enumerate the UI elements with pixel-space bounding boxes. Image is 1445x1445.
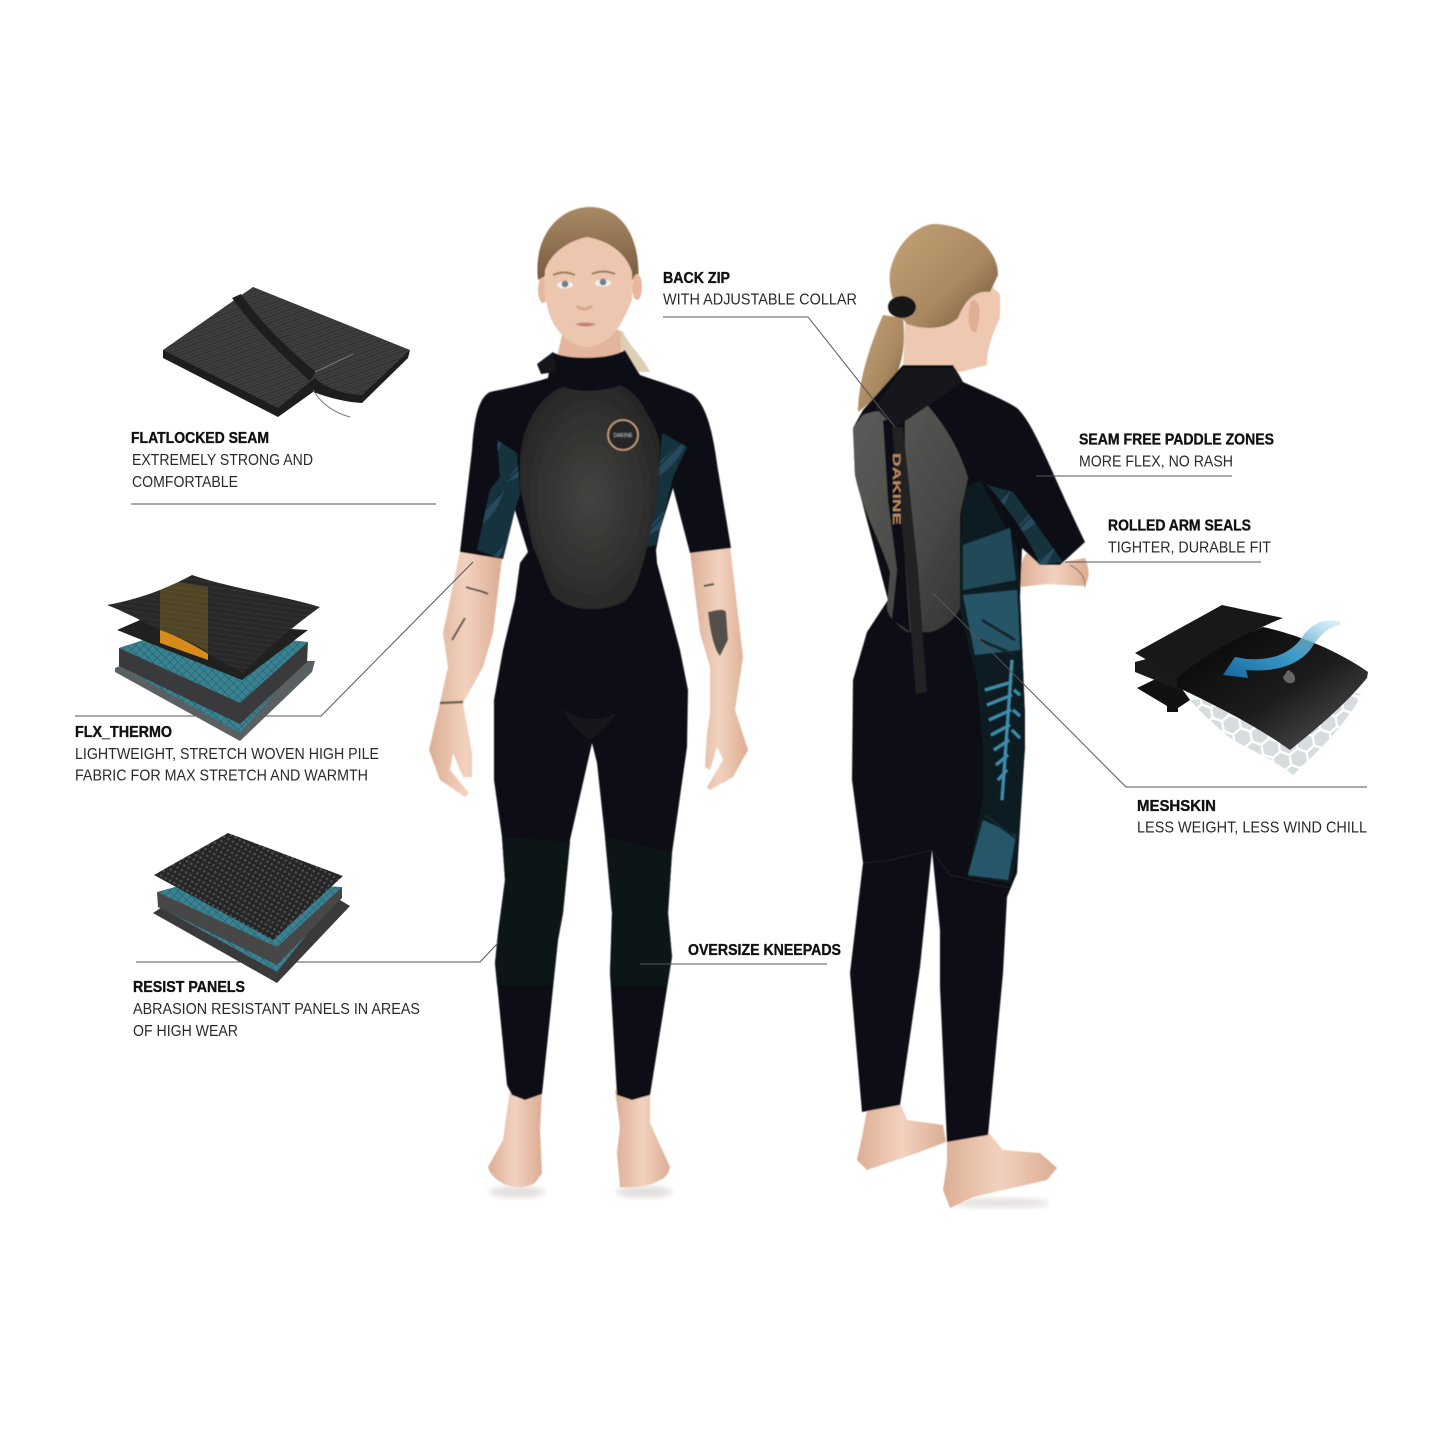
ears <box>538 274 642 303</box>
leader: back zip <box>663 317 895 427</box>
text: resist panels <box>133 979 420 1040</box>
knee panels <box>495 837 672 985</box>
collar flap <box>875 368 963 428</box>
text: oversize kneepads: OVERSIZE KNEEPADS <box>688 942 841 959</box>
text: seam free paddle zones: SEAM FREE PADDLE ZONES <box>1079 432 1274 448</box>
leader: resist panels <box>136 943 498 962</box>
leader: seam free paddle zones <box>1036 475 1232 477</box>
text: resist panels: RESIST PANELS <box>133 979 245 996</box>
text: meshskin <box>1137 798 1367 836</box>
face <box>544 237 632 347</box>
text: back zip <box>663 270 857 308</box>
text: flx thermo: FLX_THERMO <box>75 724 172 741</box>
text: rolled arm seals <box>1108 518 1271 556</box>
bottom layer <box>153 900 350 983</box>
sample top surface <box>163 287 410 408</box>
blue airflow arrow <box>1223 620 1340 678</box>
arm tattoos <box>440 584 728 703</box>
leader: rolled arm seals <box>1065 561 1261 563</box>
folded sleeve print <box>987 485 1063 565</box>
text: flatlocked seam <box>131 430 313 491</box>
text: flatlocked seam: COMFORTABLE <box>132 474 238 491</box>
icon: meshskin layer stack <box>1135 605 1368 775</box>
text: back zip: WITH ADJUSTABLE COLLAR <box>663 292 857 308</box>
eyes and mouth <box>553 272 615 326</box>
text: flatlocked seam: FLATLOCKED SEAM <box>131 430 269 447</box>
teal leaves <box>963 528 1016 590</box>
side print panel <box>960 480 1025 883</box>
text: resist panels: OF HIGH WEAR <box>133 1023 238 1040</box>
neck <box>556 330 622 362</box>
bottom layer <box>115 660 315 741</box>
text: flx thermo <box>75 724 379 784</box>
icon: flatlocked seam material sample <box>163 287 410 417</box>
text: meshskin: MESHSKIN <box>1137 798 1216 815</box>
ear <box>969 300 979 332</box>
text: flx thermo: LIGHTWEIGHT, STRETCH WOVEN HIGH PILE <box>75 746 379 763</box>
text: seam free paddle zones <box>1079 432 1274 470</box>
back model in wetsuit <box>850 224 1089 1208</box>
back grey panel <box>853 405 968 632</box>
loose thread <box>313 354 353 417</box>
hex mesh underlayer <box>1190 693 1363 775</box>
block side <box>157 887 342 965</box>
middle black layer <box>1135 650 1180 690</box>
print panels <box>477 433 687 559</box>
back wetsuit body <box>850 365 1085 1142</box>
chest panel <box>520 385 660 609</box>
hair <box>890 224 998 328</box>
leader: oversize kneepads <box>640 963 827 965</box>
text: rolled arm seals: TIGHTER, DURABLE FIT <box>1108 540 1271 556</box>
foot shadows <box>489 1186 672 1198</box>
scrunchie <box>888 296 916 318</box>
icon: flx thermo layer stack <box>107 575 320 741</box>
text: resist panels: ABRASION RESISTANT PANELS IN AREAS <box>133 1001 420 1018</box>
chest logo: DAKINE <box>614 433 633 439</box>
leader: flx thermo <box>75 562 473 716</box>
hair <box>537 207 638 285</box>
top sheet <box>1135 605 1283 678</box>
text: flx thermo: FABRIC FOR MAX STRETCH AND WARMTH <box>75 768 368 784</box>
bright fern <box>985 660 1020 800</box>
arms and hands <box>429 546 748 797</box>
text: rolled arm seals: ROLLED ARM SEALS <box>1108 518 1251 534</box>
carbon textured top sheet <box>154 833 343 940</box>
feet <box>488 1090 670 1187</box>
text: seam free paddle zones: MORE FLEX, NO RASH <box>1079 454 1233 470</box>
teal mesh layer <box>119 628 308 703</box>
front model in wetsuit <box>429 207 748 1198</box>
dark fleece layer <box>117 620 308 680</box>
foot shadow <box>950 1198 1050 1208</box>
feet <box>857 1103 1057 1208</box>
text: meshskin: LESS WEIGHT, LESS WIND CHILL <box>1137 820 1367 836</box>
text: flatlocked seam: EXTREMELY STRONG AND <box>132 452 313 469</box>
zip strap <box>892 427 927 694</box>
orange heat panel <box>160 628 208 660</box>
brand on spine: DAKINE <box>890 453 902 525</box>
collar tab <box>537 352 556 374</box>
groin seam <box>563 708 617 740</box>
leader: flatlocked seam <box>131 503 436 505</box>
seam band <box>232 294 316 381</box>
ponytail front <box>618 330 650 372</box>
callout leader lines <box>75 317 1367 964</box>
leader: meshskin <box>933 593 1367 787</box>
text: back zip: BACK ZIP <box>663 270 730 287</box>
forearm and hand <box>1019 542 1089 587</box>
chest logo <box>608 420 638 450</box>
curved black shell <box>1177 627 1368 750</box>
head neck <box>903 285 1000 372</box>
heat glow <box>160 582 208 652</box>
arm tattoo line <box>1070 565 1085 587</box>
sample edge thickness <box>163 350 410 417</box>
icon: resist panels layer stack <box>153 833 350 983</box>
water droplet <box>1283 670 1295 683</box>
wetsuit body <box>460 350 731 1100</box>
mid block side <box>119 642 308 724</box>
teal mesh layer <box>157 880 342 947</box>
knee and thigh seam <box>863 850 1010 888</box>
ponytail <box>858 315 904 412</box>
top woven sheet <box>107 575 320 673</box>
zip spine <box>883 420 910 632</box>
lower black layer <box>1137 672 1190 712</box>
